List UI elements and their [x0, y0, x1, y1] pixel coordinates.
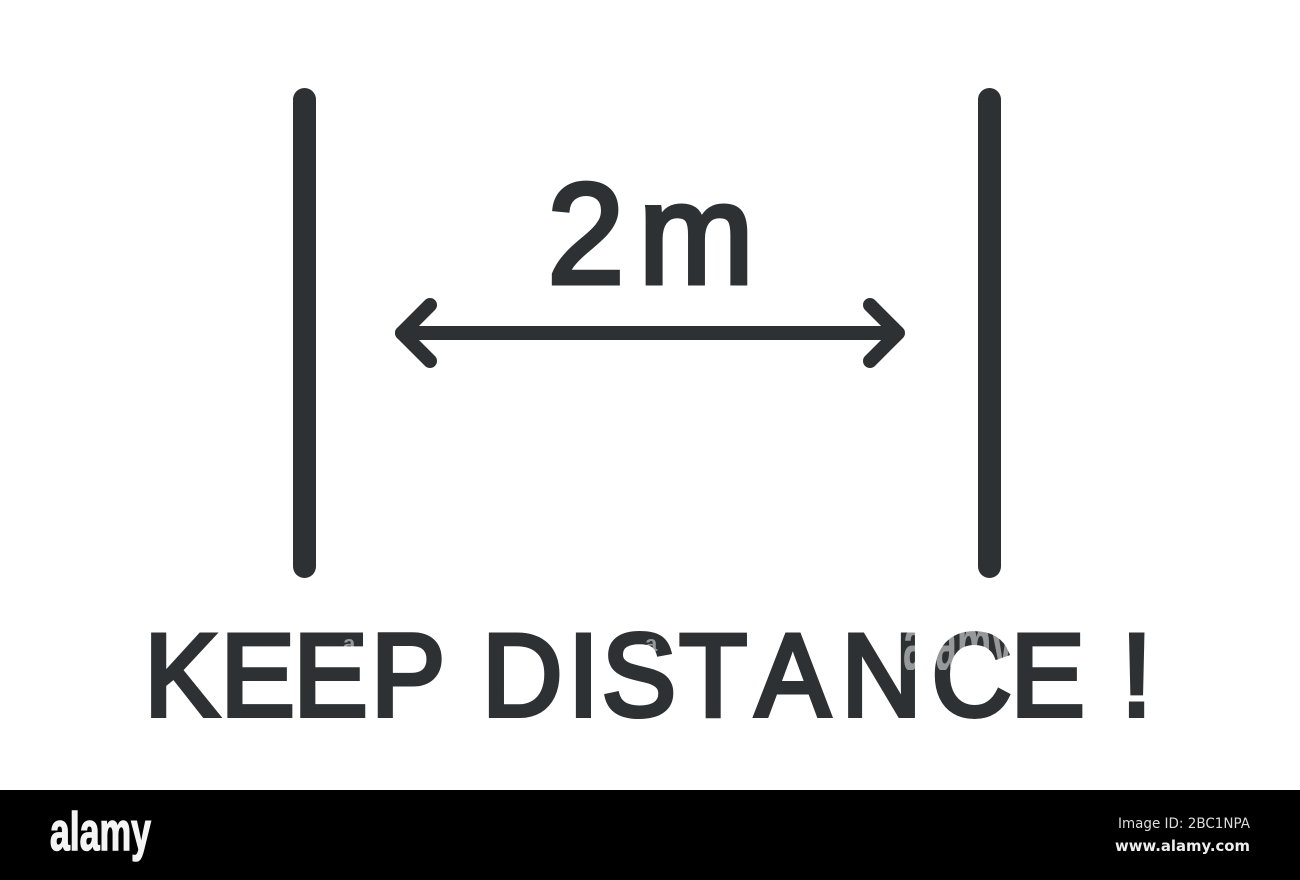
- left vertical barrier line: [293, 88, 316, 578]
- infographic canvas: alamy: [903, 599, 1013, 687]
- footer logo: alamy: alamy: [50, 802, 151, 862]
- watermark fragments over heading: [344, 631, 1008, 670]
- heading: KEEP DISTANCE !: KEEP DISTANCE !: [144, 611, 1152, 741]
- right vertical barrier line: [978, 88, 1001, 578]
- watermark fragments over heading: a: [343, 631, 356, 656]
- footer bar: [0, 790, 1300, 880]
- footer website: www.alamy.com: [1115, 837, 1250, 855]
- arrow: double-headed distance arrow: [402, 305, 898, 361]
- watermark fragments over heading: a: [645, 631, 658, 656]
- distance label: 2m: 2m: [547, 153, 754, 313]
- footer image id: Image ID: 2BC1NPA: [1118, 816, 1250, 832]
